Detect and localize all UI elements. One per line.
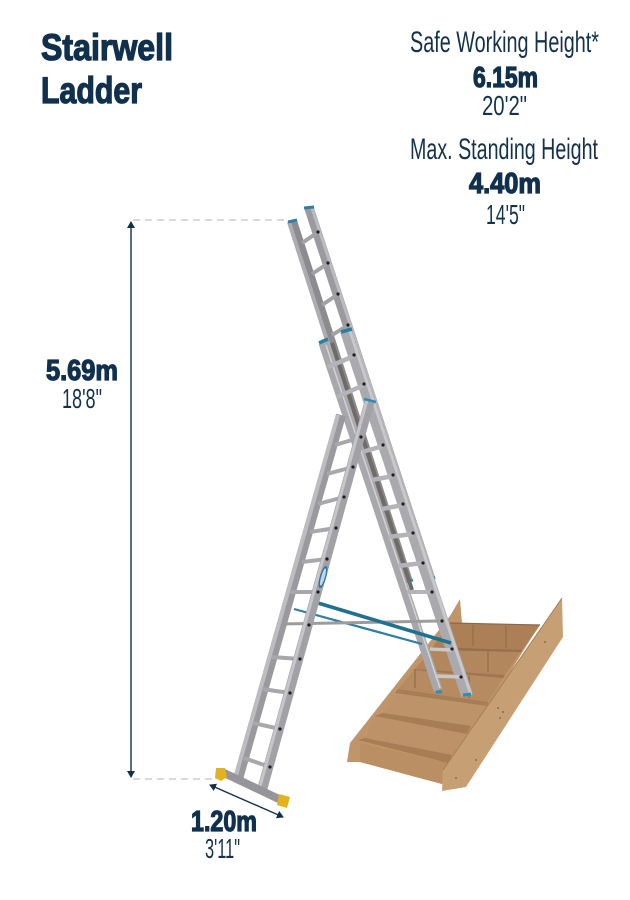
back ladder: middle section (319, 329, 471, 695)
front ladder section (222, 399, 376, 800)
safe working height spec (410, 26, 599, 121)
safe working height spec: 6.15m (473, 62, 538, 94)
blue bracing straps and spreader bar (281, 603, 451, 644)
rung rivets (268, 230, 463, 769)
title: Ladder (41, 70, 142, 111)
back ladder: top section (288, 207, 435, 583)
max standing height spec (410, 133, 598, 230)
height dimension line (131, 220, 288, 779)
wooden stairs (347, 598, 563, 791)
icon: yellow right foot cap (277, 794, 290, 808)
max standing height spec: 14'5" (486, 199, 525, 230)
safe working height spec: 20'2" (482, 90, 527, 121)
height label: 18'8" (62, 383, 102, 414)
title: Stairwell (41, 27, 173, 68)
width dimension arrow (210, 785, 283, 817)
width label (191, 806, 257, 864)
height label: 5.69m (46, 355, 118, 387)
max standing height spec: 4.40m (469, 168, 541, 200)
icon: ladder brand badge (317, 565, 329, 589)
width label: 3'11" (205, 833, 240, 864)
title (41, 27, 173, 111)
height label (46, 355, 118, 414)
width label: 1.20m (191, 806, 257, 838)
icon: yellow left foot cap (215, 768, 227, 781)
